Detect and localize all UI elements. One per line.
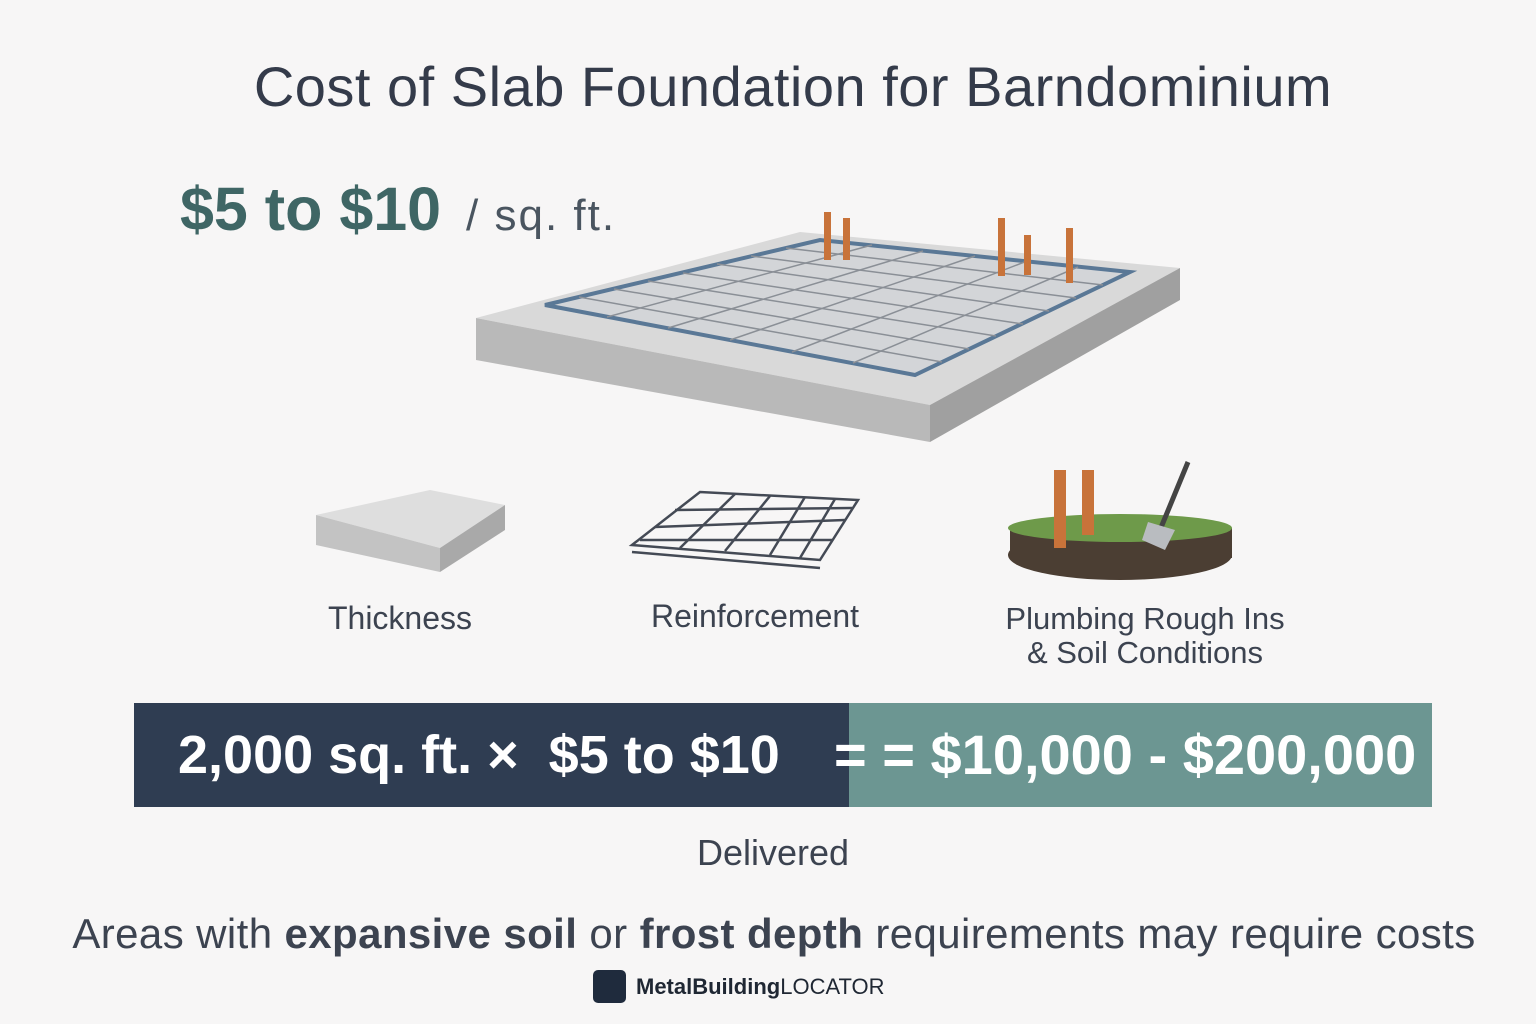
left text: 2,000 sq. ft. × $5 to $10 (178, 725, 780, 785)
logo: MetalBuilding (636, 974, 780, 998)
label: reinforcement: Reinforcement (651, 598, 859, 634)
left part (134, 703, 849, 807)
label: plumbing: Plumbing Rough Ins (1005, 601, 1285, 636)
logo: LOCATOR (780, 974, 885, 998)
label: plumbing: & Soil Conditions (1027, 635, 1263, 670)
label: plumbing (1005, 601, 1285, 670)
icon: thickness block (316, 490, 505, 572)
icon: plumbing and soil (1008, 462, 1232, 580)
delivered label: Delivered (697, 832, 849, 873)
label: thickness: Thickness (328, 600, 472, 636)
logo (593, 970, 885, 1003)
icon: reinforcement mesh (632, 492, 858, 568)
price per sq ft: $5 to $10 / sq. ft. (180, 175, 616, 243)
title: Cost of Slab Foundation for Barndominium (254, 55, 1332, 118)
footnote: Areas with expansive soil or frost depth requirements may require costs (72, 910, 1476, 957)
equation bar (134, 703, 1432, 807)
right text: = = $10,000 - $200,000 (834, 723, 1416, 786)
